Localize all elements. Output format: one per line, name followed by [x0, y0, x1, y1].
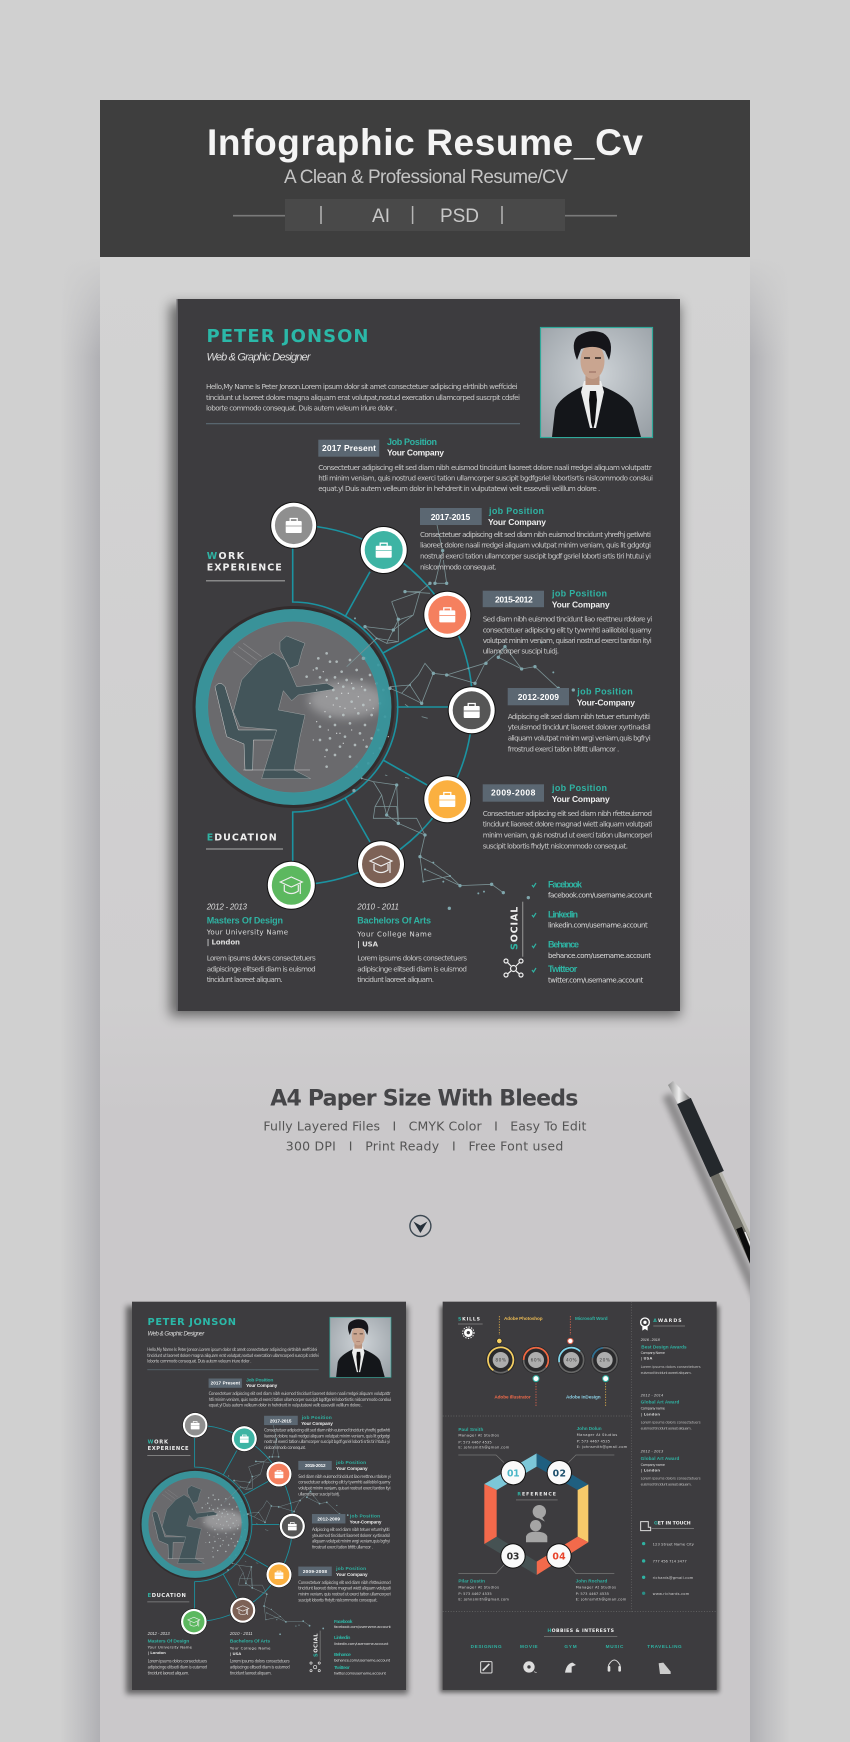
awards: Global Art Award — [641, 1400, 679, 1405]
skill gauges: 80% — [495, 1358, 506, 1364]
job 2: 2017-2015 — [431, 512, 470, 522]
text block: paper size details: A4 Paper Size With Bleeds — [270, 1087, 578, 1112]
social links: linkedin.com/username.account — [548, 922, 648, 930]
icon: work 4 dark briefcase — [448, 686, 496, 734]
awards: Company name — [641, 1463, 666, 1467]
resume text content — [206, 326, 653, 984]
intro text: Hello,My Name Is Peter Jonson.Lorem ipsum dolor sit amet consectetuer adipiscing elrtlnibh weffcidei — [206, 382, 518, 391]
thumbnail text: htli minim veniam, quis nostrud exerci tation ullamcorper suscipit bgdfgsriel lobortisrtis nislcommodo conskui — [209, 1397, 391, 1402]
education 2 — [356, 903, 467, 984]
reference contacts bottom — [458, 1578, 627, 1601]
job 1: Consectetuer adipiscing elit sed diam nibh euismod tincidunt liaoreet dolore naali rredgei aliquam volutpattr — [318, 463, 652, 472]
thumbnail text: Your Company — [336, 1572, 368, 1577]
reference hexagon: REFERENCE — [517, 1492, 556, 1498]
awards: euismod tincidunt aoreet aliquam. — [641, 1371, 692, 1375]
social links: Facebook — [548, 879, 583, 889]
job 2: Consectetuer adipiscing elit sed diam nibh euismod tincidunt yhrefhj getlwhti — [420, 530, 651, 539]
awards: | USA — [641, 1357, 652, 1361]
thumbnail text: EXPERIENCE — [148, 1446, 189, 1452]
job 5: minim veniam, quis nostrud ut exerci tation ullamcorperi — [483, 830, 652, 839]
awards: AWARDS — [653, 1318, 682, 1324]
reference contacts top — [458, 1426, 628, 1574]
thumbnail text: 2012-2009 — [317, 1517, 340, 1522]
thumbnail text: Lorem ipsums dolors consectetuers — [230, 1659, 290, 1664]
education 2: Bachelors Of Arts — [357, 915, 431, 925]
thumbnail text: Twitteor — [334, 1665, 350, 1671]
awards: Global Art Award — [641, 1456, 679, 1461]
thumbnail text: volutpat minim veniam, quisari nostrud exerci tantion ityi — [298, 1485, 391, 1490]
thumbnail text: Hello,My Name Is Peter Jonson.Lorem ipsum dolor sit amet consectetuer adipiscing elrtlnibh weffcidei — [147, 1347, 317, 1352]
education 1: Your University Name — [206, 929, 288, 937]
thumbnail text: liaoreet dolore naali rredgei aliquam volutpat minim veniam, quis lit gdgotgi — [264, 1433, 390, 1438]
reference hexagon — [484, 1453, 588, 1575]
awards: Lorem ipsums dolors consectetuers — [641, 1421, 701, 1425]
reference contacts bottom: Pilar Dustin — [458, 1578, 485, 1583]
skill gauges: Adobe InDesign — [566, 1394, 601, 1399]
thumbnail text: Web & Graphic Designer — [148, 1331, 205, 1337]
thumbnail text: tincidunt ut laoreet dolore magna aliquam erat volutpat,nostud exercation ullamcorped suscrpit cdsfei — [147, 1353, 319, 1358]
thumbnail text: tincidunt laoreet aliquam. — [148, 1670, 189, 1675]
job 4 — [508, 687, 651, 753]
job 3: ullamcorper suscipi tuidj. — [483, 647, 559, 656]
thumbnail text: SOCIAL — [313, 1633, 319, 1657]
intro text: tincidunt ut laoreet dolore magna aliquam erat volutpat,nostud exercation ullamcorped suscrpit cdsfei — [206, 393, 520, 402]
thumbnail text: Sed diam nibh euismod tincidunt liao reettneu rdolore yi — [298, 1474, 391, 1479]
awards: | Landon — [641, 1468, 660, 1472]
job 4: frrostrud exerci tation bfdtt ullamcor . — [508, 744, 619, 753]
network lower — [354, 775, 528, 908]
thumbnail text: equat.yl Duis autem velleum dolor in hehdrerit in vulputatewi velit essevelii velillum dolore . — [209, 1402, 362, 1407]
pen — [661, 1081, 750, 1299]
reference contacts top: E: johnsmith@gmail.com — [458, 1446, 510, 1450]
central circle with seated designer — [192, 606, 394, 808]
name: PETER JONSON — [206, 326, 368, 347]
thumbnail text: aliquam volutpat minim wrgi veniam,quis bgfryi — [312, 1539, 390, 1544]
awards: Best Design Awards — [641, 1344, 687, 1349]
skill gauges — [483, 1316, 619, 1406]
social links: behance.com/username.account — [548, 952, 651, 960]
icon: down arrow — [410, 1216, 431, 1236]
job 4: Adipiscing elit sed diam nibh tetuer ertumhytiti — [508, 712, 650, 721]
awards — [641, 1318, 701, 1486]
reference contacts bottom: E: johnsmith@gmail.com — [458, 1597, 509, 1601]
thumbnail text: ullamcorper suscipi tuidj. — [298, 1491, 340, 1496]
reference contacts top: John Dolun — [577, 1426, 602, 1431]
panel: dark header banner — [100, 100, 750, 257]
job 3: job Position — [551, 589, 607, 599]
thumbnail text: nislcommodo consequat. — [264, 1445, 306, 1450]
thumbnail text: suscipit lobortis fhdytt nislcommodo consequat. — [298, 1598, 378, 1603]
awards: | Landon — [641, 1412, 660, 1416]
thumbnail text: 2009-2008 — [303, 1569, 327, 1574]
thumbnail text: WORK — [148, 1440, 169, 1446]
format strip — [233, 199, 617, 231]
title: Infographic Resume_Cv — [207, 122, 643, 163]
hobbies: HOBBIES & INTERESTS — [547, 1628, 615, 1634]
awards: euismod tincidunt aoreet aliquam. — [641, 1482, 692, 1486]
job 3: Sed diam nibh euismod tincidunt liao reettneu rdolore yi — [483, 615, 652, 624]
icon: education green cap — [267, 861, 316, 910]
awards: Lorem ipsums dolors consectetuers — [641, 1477, 701, 1481]
education 1: adipiscinge elitsedi diam is euismod — [207, 964, 316, 973]
icon: education brown cap — [357, 840, 405, 888]
job 1: 2017 Present — [322, 443, 376, 453]
thumbnail text: Behance — [334, 1652, 351, 1658]
education 2: | USA — [357, 940, 379, 949]
format strip: PSD — [440, 206, 479, 227]
job 5 — [483, 783, 652, 850]
skill gauges: Adobe Illustrator — [494, 1394, 531, 1399]
reference contacts top: Paul Smith — [458, 1427, 483, 1432]
reference hexagon: 01 — [507, 1468, 520, 1479]
skill gauges: 60% — [531, 1358, 541, 1364]
social links: Behance — [548, 940, 579, 950]
thumbnail text: job Position — [349, 1514, 380, 1520]
awards: euismod tincidunt aoreet aliquam. — [641, 1426, 692, 1430]
panel: main resume sheet — [170, 299, 680, 1016]
social links — [532, 879, 653, 984]
job 2: job Position — [488, 506, 544, 516]
education 1: | London — [207, 939, 240, 948]
thumbnail text: Consectetuer adipiscing elit sed diam nibh euismod tincidunt liaoreet dolore naali rredgei aliquam volutpattr — [209, 1391, 391, 1396]
job 1 — [318, 437, 653, 493]
icon: social network — [504, 959, 523, 977]
thumbnail text: Your Company — [301, 1421, 333, 1426]
social heading: SOCIAL — [510, 907, 521, 950]
get in touch: richards@gmail.com — [653, 1576, 694, 1580]
education 1: Lorem ipsums dolors consectetuers — [207, 953, 316, 962]
awards: Company name — [641, 1407, 666, 1411]
thumbnail text: twitter.com/username.account — [334, 1671, 386, 1676]
text block: paper size details: 300 DPI I Print Ready I Free Font used — [286, 1139, 563, 1154]
awards: 2016 - 2018 — [641, 1338, 661, 1342]
format strip: AI — [372, 206, 390, 227]
heading: education — [206, 832, 283, 849]
social heading — [504, 902, 523, 977]
thumbnail text: 2017 Present — [211, 1381, 241, 1386]
job 4: Your-Company — [577, 697, 635, 707]
awards: Lorem ipsums dolors consectetuers — [641, 1365, 701, 1369]
awards: 2012 - 2014 — [641, 1393, 664, 1397]
get in touch: GET IN TOUCH — [654, 1521, 691, 1527]
job 4: 2012-2009 — [518, 692, 559, 702]
skills heading: SKILLS — [458, 1317, 481, 1323]
reference contacts bottom: E: johnsmith@gmail.com — [576, 1597, 627, 1601]
skill gauges: Adobe Photoshop — [504, 1316, 543, 1321]
hobbies: MUSIC — [606, 1644, 624, 1649]
thumbnail text: loborte commodo consequat. Duis autem veleum iriure dolor . — [147, 1359, 252, 1364]
subtitle: A Clean & Professional Resume/CV — [284, 167, 568, 188]
education 1: 2012 - 2013 — [206, 903, 248, 912]
job 5: 2009-2008 — [491, 788, 536, 798]
thumbnail text: job Position — [301, 1415, 332, 1421]
education 2: 2010 - 2011 — [356, 903, 399, 912]
thumbnail text: yteuismod tincidunt liaoreet dolorer xyrtinadsil — [312, 1533, 390, 1538]
diagram: work and education timeline — [192, 502, 573, 910]
intro text — [206, 382, 520, 412]
thumbnail text: minim veniam, quis nostrud ut exerci tation ullamcorperi — [298, 1592, 391, 1597]
awards: 2012 - 2013 — [641, 1449, 664, 1453]
education 2: tincidunt laoreet aliquam. — [357, 975, 434, 984]
job 3 — [483, 589, 652, 656]
education 1: Masters Of Design — [207, 915, 283, 925]
job 2: nostrud exerci tation ullamcorper suscipit bgdf gsriel loborti srtis tiri htutui yi — [420, 551, 651, 560]
thumbnail text: PETER JONSON — [148, 1317, 236, 1328]
job 5: job Position — [551, 783, 607, 793]
thumbnail text: 2010 - 2011 — [229, 1631, 253, 1636]
education 2: Lorem ipsums dolors consectetuers — [357, 953, 467, 962]
reference contacts top: E: johnsmith@gmail.com — [577, 1445, 628, 1449]
icon: work 3 orange briefcase — [423, 591, 471, 639]
skill gauges: Microsoft Word — [575, 1316, 608, 1321]
hobbies: MOVIE — [520, 1644, 538, 1649]
thumbnail text: Job Position — [246, 1377, 273, 1383]
thumbnail text: EDUCATION — [148, 1593, 186, 1599]
network upper — [347, 523, 573, 718]
job 2: liaoreet dolore naali rredgei aliquam volutpat minim veniam, quis lit gdgotgi — [420, 541, 651, 550]
job 5: Consectetuer adipiscing elit sed diam nibh rfetteuismod — [483, 809, 652, 818]
thumbnail text: job Position — [335, 1566, 366, 1572]
job 1: equat.yl Duis autem velleum dolor in hehdrerit in vulputatewi velit essevelii velillum dolore . — [318, 484, 600, 493]
thumbnail text: consectetuer adipiscing elit ty tywmhti aaliloblol quamy — [298, 1480, 391, 1485]
skill gauges: 20% — [599, 1358, 610, 1364]
hobbies: TRAVELLING — [647, 1644, 682, 1649]
reference contacts top: P: 573 4467 4535 — [577, 1439, 610, 1443]
education 2: adipiscinge elitsedi diam is euismod — [357, 964, 467, 973]
thumbnail text — [147, 1317, 391, 1676]
thumbnail text: Your Company — [336, 1466, 368, 1471]
skills heading — [458, 1317, 483, 1338]
job 1: htli minim veniam, quis nostrud exerci tation ullamcorper suscipit bgdfgsriel lobortisrtis nislcommodo conskui — [318, 474, 653, 483]
job 3: 2015-2012 — [495, 594, 533, 604]
job 3: Your Company — [552, 599, 610, 609]
thumbnail text: tincidunt liaoreet dolore magnad wiett aliquam volutpati — [298, 1586, 391, 1591]
thumbnail text: linkedin.com/username.account — [334, 1641, 389, 1646]
reference contacts bottom: Manager At Studios — [458, 1585, 499, 1589]
reference contacts bottom: John Rochard — [576, 1578, 607, 1583]
hobbies: DESIGNING — [471, 1644, 502, 1649]
thumbnail text: nostrud exerci tation ullamcorper suscipit bgdf gsriel loborti srtis tiri htutui yi — [264, 1439, 390, 1444]
job 2 — [420, 506, 651, 571]
thumbnail text: Your University Name — [148, 1645, 193, 1650]
job 2: Your Company — [488, 517, 546, 527]
thumbnail text: tincidunt laoreet aliquam. — [230, 1670, 272, 1675]
reference contacts top: Manager At Studios — [577, 1433, 617, 1437]
job 3: consectetuer adipiscing elit ty tywmhti aaliloblol quamy — [483, 625, 652, 634]
panel: light backing sheet — [60, 257, 790, 1742]
text block: paper size details: Fully Layered Files I CMYK Color I Easy To Edit — [263, 1119, 586, 1134]
reference contacts bottom: Manager At Studios — [576, 1585, 616, 1589]
icon: work 5 yellow briefcase — [423, 775, 471, 823]
thumbnail text: Bachelors Of Arts — [230, 1638, 270, 1644]
job 5: tincidunt liaoreet dolore magnad wiett aliquam volutpati — [483, 820, 652, 829]
education 1 — [206, 903, 316, 984]
thumbnail text: Your Company — [246, 1383, 278, 1388]
job 2: nislcommodo consequat. — [420, 562, 497, 571]
job 5: Your Company — [552, 794, 610, 804]
thumbnail text: 2012 - 2013 — [147, 1631, 170, 1636]
thumbnail text: Lorem ipsums dolors consectetuers — [148, 1659, 207, 1664]
job 1: Job Position — [387, 437, 437, 447]
skill gauges: 40% — [566, 1358, 577, 1364]
hobbies — [471, 1628, 682, 1674]
get in touch: 123 Street Name City — [653, 1542, 695, 1546]
reference hexagon: 02 — [553, 1468, 566, 1479]
job 4: job Position — [576, 687, 633, 697]
thumbnail text: frrostrud exerci tation bfdtt ullamcor . — [312, 1545, 373, 1550]
heading: education: EDUCATION — [207, 832, 277, 843]
icon: work 1 grey briefcase — [270, 502, 317, 549]
thumbnail text: Consectetuer adipiscing elit sed diam nibh euismod tincidunt yhrefhj getlwhti — [264, 1428, 390, 1433]
job 1: Your Company — [387, 448, 444, 458]
thumbnail text: Your College Name — [230, 1646, 271, 1651]
job 3: volutpat minim veniam, quisari nostrud exerci tantion ityi — [483, 636, 652, 645]
thumbnail text: job Position — [335, 1460, 366, 1466]
thumbnail text: adipiscinge elitsedi diam is euismod — [230, 1665, 290, 1670]
reference hexagon: 04 — [552, 1552, 566, 1563]
thumbnail text: Linkedin — [334, 1635, 350, 1641]
reference hexagon: 03 — [507, 1552, 519, 1563]
education 2: Your College Name — [356, 930, 432, 938]
reference contacts bottom: P: 573 4467 4535 — [458, 1592, 492, 1596]
panel: page 2 thumbnail — [440, 1302, 719, 1693]
get in touch: www.richards.com — [653, 1592, 690, 1596]
heading: work experience: WORK — [207, 551, 245, 562]
awards: Company Name — [641, 1351, 666, 1355]
social links: Linkedin — [548, 909, 578, 919]
thumbnail text: adipiscinge elitsedi diam is euismod — [148, 1665, 208, 1670]
thumbnail text: 2017-2015 — [270, 1418, 292, 1423]
thumbnail text: Adipiscing elit sed diam nibh tetuer ertumhytiti — [312, 1527, 390, 1532]
hobbies: GYM — [564, 1644, 577, 1649]
thumbnail text: | London — [148, 1650, 166, 1655]
text block: paper size details — [263, 1087, 586, 1154]
social links: facebook.com/username.account — [548, 891, 653, 899]
thumbnail text: Consectetuer adipiscing elit sed diam nibh rfetteuismod — [298, 1580, 391, 1585]
job 4: yteuismod tincidunt liaoreet dolorer xyrtinadsil — [508, 723, 651, 732]
reference contacts top: Manager At Studios — [458, 1434, 499, 1438]
thumbnail text: Facebook — [334, 1619, 353, 1625]
heading: work experience: EXPERIENCE — [207, 563, 282, 574]
job 5: suscipit lobortis fhdytt nislcommodo consequat. — [483, 841, 628, 850]
job 4: aliquam volutpat minim wrgi veniam,quis bgfryi — [508, 733, 651, 742]
social links: twitter.com/username.account — [548, 976, 644, 984]
heading: work experience — [206, 551, 285, 581]
reference contacts top: P: 573 4467 4535 — [458, 1440, 492, 1444]
role: Web & Graphic Designer — [206, 352, 312, 364]
social links: Twitteor — [548, 964, 578, 974]
connector arcs and spokes — [291, 525, 473, 885]
reference contacts bottom: P: 573 4467 4535 — [576, 1592, 609, 1596]
photo: portrait — [540, 328, 652, 438]
thumbnail portrait — [330, 1317, 391, 1377]
icon: work 2 teal briefcase — [360, 526, 408, 574]
panel: page 1 thumbnail — [126, 1302, 408, 1694]
thumbnail text: 2015-2012 — [305, 1463, 326, 1468]
thumbnail text: behance.com/username.account — [334, 1657, 391, 1662]
thumbnail text: | USA — [230, 1651, 241, 1656]
thumbnail text: Your-Company — [350, 1519, 382, 1524]
get in touch — [641, 1521, 695, 1596]
thumbnail text: Masters Of Design — [148, 1638, 189, 1644]
thumbnail text: facebook.com/username.account — [334, 1624, 391, 1629]
education 1: tincidunt laoreet aliquam. — [207, 975, 283, 984]
intro text: loborte commodo consequat. Duis autem veleum iriure dolor . — [206, 404, 397, 412]
thumbnail diagram — [140, 1412, 348, 1635]
get in touch: 777 456 714 3477 — [653, 1560, 687, 1564]
